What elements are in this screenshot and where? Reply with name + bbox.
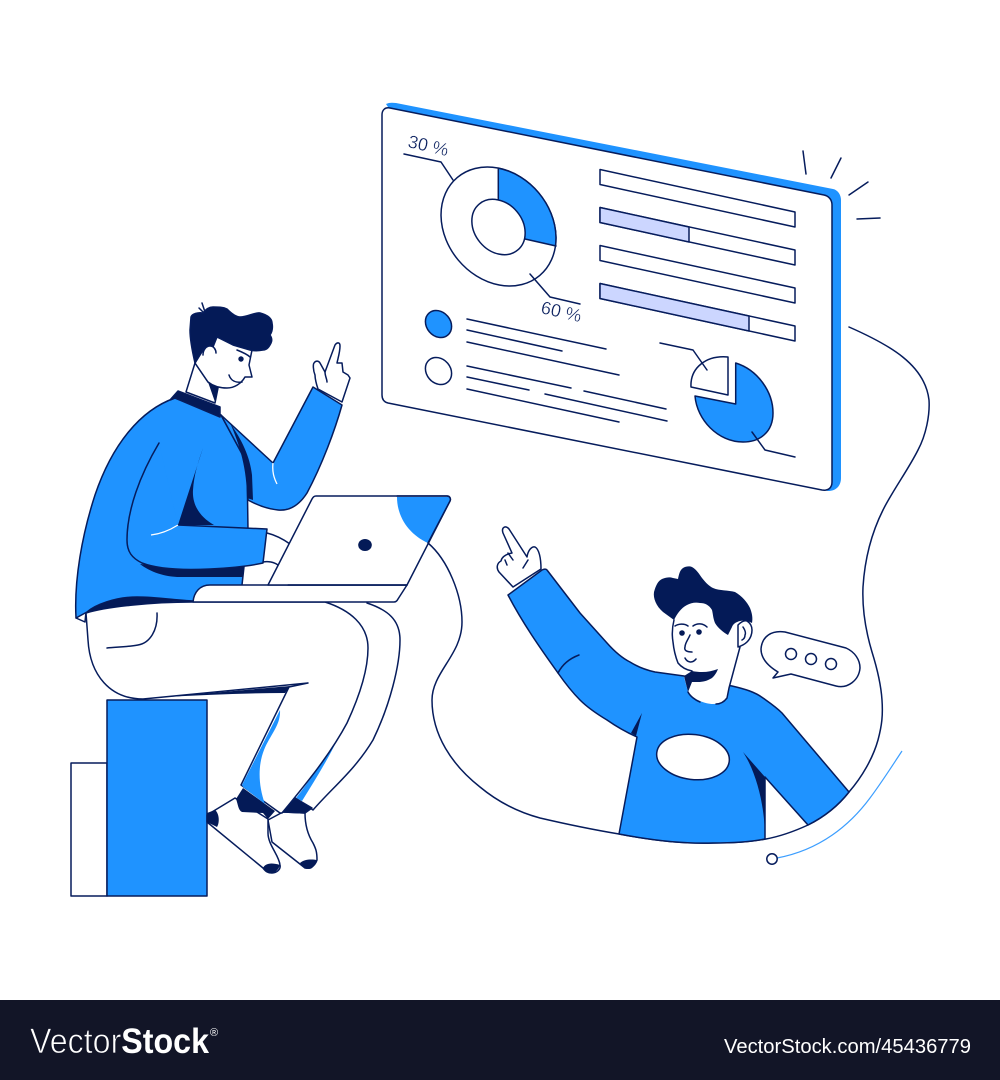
laptop base [193,585,407,602]
ear [203,346,216,355]
side shadow [743,752,765,838]
back sock [268,798,317,869]
face and neck outline [672,620,740,704]
hair [190,307,272,363]
hand finger creases [505,553,528,568]
torso shadow stripe [230,423,253,500]
sweater body [76,398,248,618]
chest oval [654,730,732,784]
blue accent curve with node [767,751,902,864]
elbow highlights [151,463,277,535]
ear [738,621,752,647]
screen corner blue [397,497,450,543]
front leg blue stripe [242,710,280,804]
arm shadow [178,448,214,525]
underarm shadow [631,713,642,736]
legend text lines [467,319,667,422]
speech bubble [761,632,860,687]
pocket [107,613,157,648]
hair [654,566,752,635]
neck [186,363,218,403]
head and neck fill [673,600,752,704]
back leg [295,603,400,810]
inner ear [742,627,745,640]
progress bars [600,170,795,341]
label 60 percent: 60 % [539,297,584,326]
finger crease [325,372,327,382]
seated man [76,303,400,873]
second man [497,527,860,843]
back leg blue stripe [296,715,348,801]
pie chart [660,343,795,457]
screen outline on corner [397,496,450,543]
raised hand [313,343,350,402]
thigh shadow [165,686,290,697]
pointing hand [497,527,541,587]
face [195,337,252,388]
board face [382,108,832,490]
lower shadow [140,564,244,577]
connecting curve [428,327,929,843]
raised arm [221,387,342,510]
collar [170,391,220,417]
facial features [675,624,707,662]
legend white dot [420,352,457,390]
laptop dot [358,539,372,551]
keyboard line [288,584,407,586]
eye and smile [229,350,250,382]
logo text: VectorStock [30,1022,209,1061]
sparkle lines [803,151,880,219]
board blue edge [386,103,841,491]
stock id: VectorStock.com/45436779 [724,1036,971,1058]
front arm [127,443,267,569]
sleeve crease [558,655,579,673]
chin shadow [208,382,218,402]
dashboard board [382,103,880,491]
donut chart [440,166,557,287]
typing fingers [263,533,290,565]
laptop [193,496,450,602]
laptop screen [268,496,450,585]
trousers and front leg [86,602,368,813]
footer bar [0,1000,1000,1080]
label 30 percent: 30 % [406,131,451,160]
collar shadow [684,669,718,692]
hem shadow [87,597,194,612]
stacked boxes seat [71,700,207,896]
front sock [207,788,280,873]
registered mark: ® [210,1027,218,1039]
label 30 percent [404,131,453,180]
sweater [508,569,849,843]
hair tuft [199,303,205,313]
legend blue dot [420,305,457,343]
hem cuff [76,612,86,622]
label 60 percent [530,274,584,326]
